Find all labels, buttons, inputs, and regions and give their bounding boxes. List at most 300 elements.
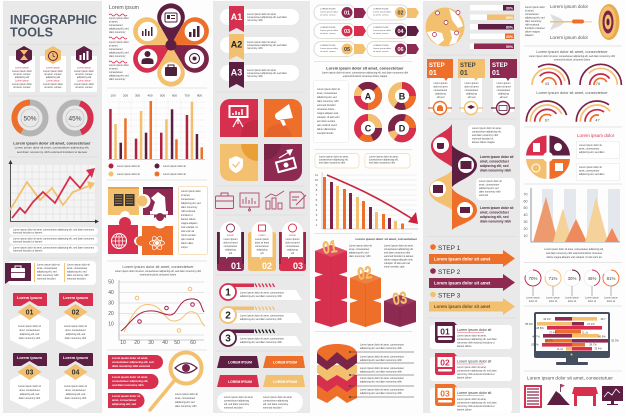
puzzle text box: adipiscing elit, sed <box>181 202 201 205</box>
card 01: 01 <box>231 261 241 271</box>
timeline red segment <box>431 124 452 167</box>
arc gauges: Lorem ipsum dolor sit amet, consectetuer <box>536 49 608 54</box>
percent rings: dolor sit <box>529 300 538 303</box>
briefcase callout: adipiscing elit, sed <box>37 270 57 274</box>
numbered pill list: LOREM IPSUM <box>320 45 335 47</box>
briefcase callout: euismod tincidunt <box>37 278 56 280</box>
card 02: dolor sit amet <box>255 242 270 244</box>
strip 1 <box>220 284 302 300</box>
arc gauges: euismod tincidunt ut laoreet dolore <box>554 58 591 62</box>
ribbons A1 A2 A3: Lorem ipsum dolor sit amet, <box>247 13 277 16</box>
list cards with badges: nonummy nibh euismod tincidunt ut <box>457 342 495 344</box>
petal diagram text column: diam nonummy <box>109 31 126 34</box>
curve chart: 20 <box>134 340 140 346</box>
petal diagram text column <box>109 5 139 81</box>
cube text: adipiscing elit, sed <box>349 252 369 254</box>
step 1 <box>429 244 515 267</box>
puzzle text box: minim veniam, <box>181 234 197 237</box>
numbered pill list: LOREM IPSUM <box>373 45 388 47</box>
icon: rising bars <box>76 46 92 64</box>
briefcase callout: diam nonummy nibh <box>37 274 59 277</box>
list cards with badges: Lorem ipsum dolor sit <box>457 360 491 364</box>
bar chart legend: Lorem ipsum dolor sit <box>117 173 140 176</box>
card text: Lorem ipsum <box>46 80 60 82</box>
list cards with badges: laoreet dolore <box>457 376 472 380</box>
dart and target: dolore magna <box>525 30 540 34</box>
card text: adipiscing elit <box>77 76 92 79</box>
timeline text boxes: adipiscing elit, sed <box>480 164 509 168</box>
cube text: euismod tincidunt ut laoreet <box>384 255 414 258</box>
dotted text box: diam nonummy nibh <box>317 100 339 103</box>
grouped bar chart: 400 <box>147 94 153 98</box>
red callout tags: Lorem ipsum dolor sit amet, <box>112 375 148 379</box>
curve chart: 50 <box>174 340 180 346</box>
percent rings: dolor sit <box>607 300 616 303</box>
grouped bar chart: 700 <box>184 94 190 98</box>
strip 1: Lorem ipsum dolor sit amet, consectetuer <box>240 292 284 294</box>
percent rings: dolor sit <box>588 300 597 303</box>
tag captions: diam nonummy nibh <box>19 337 41 340</box>
curve chart: 30 <box>108 300 114 306</box>
dotted text box: magna aliquam erat <box>317 112 338 115</box>
step 3: STEP 3 <box>438 292 461 300</box>
step card dark: Lorem ipsum <box>497 82 510 85</box>
dotted text box: suscipit lobortis <box>317 132 334 135</box>
3D numbers <box>321 237 408 309</box>
puzzle text box: laoreet dolore <box>181 218 196 221</box>
numbered pill list: Lorem ipsum dolor <box>320 47 338 50</box>
cube text: amet, consectetuer <box>349 248 370 251</box>
bar chart legend: Lorem ipsum dolor sit <box>163 165 186 168</box>
strip 3: 3 <box>225 334 231 344</box>
petal icons <box>142 13 200 76</box>
curve chart: 60 <box>190 340 196 346</box>
donut section heading: Lorem ipsum dolor sit amet, consectetuer <box>326 66 404 70</box>
percent rings: Lorem ipsum <box>526 296 540 300</box>
icon: monitor chart <box>602 386 623 405</box>
bottom text pill <box>217 392 303 412</box>
card 03: Lorem ipsum <box>286 238 299 241</box>
dotted text box: adipiscing elit, sed <box>317 96 337 99</box>
tag captions: adipiscing elit, sed <box>66 393 86 396</box>
ring A: A <box>365 92 372 102</box>
ring C: C <box>365 124 372 134</box>
percent rings: Lorem ipsum <box>546 296 560 300</box>
title <box>10 12 98 40</box>
curve chart: 10 <box>120 340 126 346</box>
dart and target: nibh euismod <box>525 24 540 26</box>
step card yellow <box>458 59 485 114</box>
donut caption <box>13 140 91 154</box>
briefcase callout: Lorem ipsum dolor sit <box>37 264 60 266</box>
petal diagram text column: Lorem ipsum dolor <box>109 17 129 20</box>
text pills: Lorem ipsum dolor sit amet, consectetuer adipiscing elit, sed diam nonummy <box>13 228 95 232</box>
step card orange: elit sed <box>437 96 445 99</box>
numbered pill list: LOREM IPSUM <box>373 8 388 10</box>
card text: Lorem ipsum dolor <box>74 83 94 86</box>
outline: document <box>290 192 306 208</box>
progress bars: 90% <box>506 45 514 49</box>
percent rings: 70% <box>529 276 537 281</box>
timeline text boxes: Lorem ipsum dolor sit <box>480 206 514 210</box>
timeline text boxes: diam nonummy nibh <box>480 168 511 172</box>
dart and target: sit amet, <box>525 10 534 12</box>
monitor butterfly chart: 11.2x <box>557 347 564 351</box>
monitor butterfly chart: 55.3% <box>611 338 619 342</box>
timeline text boxes: Lorem ipsum dolor sit <box>480 155 514 159</box>
step card dark: elit sed <box>500 96 508 99</box>
briefcase callout <box>5 261 96 285</box>
red callout tags: consectetuer adipiscing elit, <box>112 379 148 383</box>
step 2 <box>429 268 515 291</box>
badge 01: 01 <box>440 326 450 336</box>
timeline text boxes: Lorem ipsum dolor sit <box>479 180 502 183</box>
puzzle text box: erat volutpat. Ut <box>181 226 198 229</box>
bottom text pill: Lorem ipsum dolor sit amet <box>263 396 292 399</box>
step card yellow: elit sed <box>468 96 476 99</box>
timeline text boxes: euismod <box>479 194 489 197</box>
timeline text boxes: adipiscing elit, sed <box>480 215 509 219</box>
monitor butterfly chart: 28.7% <box>589 342 597 346</box>
petal diagram <box>128 3 214 87</box>
arc gauges: Lorem ipsum dolor sit amet, consectetuer <box>536 90 608 95</box>
red callout tags: Lorem ipsum dolor sit <box>112 394 140 398</box>
timeline text boxes: amet, consectetuer <box>480 210 510 214</box>
numbered strips <box>220 284 302 346</box>
ring D: D <box>399 124 406 134</box>
card 02: elit <box>260 252 264 255</box>
gauge 67: 67 <box>545 118 550 122</box>
layered chevron stack: Lorem ipsum dolor sit amet, consectetuer <box>360 367 404 370</box>
dart and target: diam nonummy <box>525 20 542 23</box>
text pills: Lorem ipsum dolor sit amet, consectetuer adipiscing elit, sed diam nonummy <box>13 246 95 250</box>
layered chevron stack: Lorem ipsum dolor sit amet, consectetuer <box>360 356 404 358</box>
briefcase callout: Lorem ipsum dolor sit <box>67 264 90 266</box>
numbered hexagon tags <box>10 293 95 409</box>
petal diagram text column: Lorem ipsum dolor <box>109 41 129 44</box>
card text: adipiscing elit <box>15 76 30 79</box>
petal diagram text column: consectetuer <box>109 71 123 74</box>
layered chevron stack: adipiscing elit, sed diam nonummy nibh <box>360 347 402 350</box>
card text: Lorem ipsum dolor <box>12 70 32 73</box>
title: TOOLS <box>10 24 53 40</box>
tag 04 <box>59 353 93 380</box>
monitor butterfly chart: 11.2x <box>582 330 589 334</box>
percent rings: 30% <box>568 276 576 281</box>
step card dark: adipiscing <box>498 92 509 96</box>
list cards with badges: laoreet dolore <box>457 408 472 412</box>
card 01: Lorem <box>227 234 234 237</box>
petal diagram text column: diam nonummy <box>109 55 126 58</box>
dotted text box: tation ullamcorper <box>317 128 336 131</box>
pie caption boxes: Lorem ipsum dolor sit <box>579 144 602 147</box>
grouped bar chart: 800 <box>197 94 202 98</box>
step card dark: STEP <box>492 63 508 69</box>
arc gauges: Lorem ipsum dolor sit amet, consectetuer adipiscing elit, sed diam nonummy nibh <box>529 55 616 58</box>
petal diagram text column: sit amet, <box>109 68 118 70</box>
numbered pill list: 02 <box>397 10 404 16</box>
step card yellow: STEP <box>460 63 476 69</box>
card 01: consectetuer <box>224 245 238 248</box>
percent rings: 46% <box>588 276 596 281</box>
ribbon A1: A1 <box>231 12 242 22</box>
descending bar chart <box>315 172 418 229</box>
step 2: Lorem ipsum dolor sit amet <box>434 280 491 286</box>
monitor butterfly chart: 40.7% <box>532 334 540 338</box>
list cards with badges: nonummy nibh euismod tincidunt ut <box>457 405 495 408</box>
line chart heading <box>115 264 202 276</box>
card 01: elit <box>229 252 232 255</box>
bottom text pill: euismod tincidunt <box>224 406 243 410</box>
card 01 <box>217 222 244 271</box>
triangle area chart: 30 <box>524 220 528 224</box>
step 1: STEP 1 <box>438 245 461 252</box>
gauge 47: 47 <box>595 118 600 122</box>
layered chevron stack: adipiscing elit, sed diam nonummy nibh <box>360 359 402 362</box>
ribbon labels <box>217 356 305 387</box>
monitor butterfly chart: 27.4% <box>587 322 595 326</box>
cube text: sed diam nonummy nibh <box>384 252 411 254</box>
timeline text boxes: consectetuer adipiscing elit, <box>472 130 502 134</box>
tag captions: Lorem ipsum dolor sit <box>18 325 41 328</box>
petal diagram text column: Lorem ipsum dolor <box>109 64 129 67</box>
tag captions: amet, consectetuer <box>19 389 40 392</box>
timeline text boxes: sed diam nonummy nibh <box>472 134 499 137</box>
bottom text pill: euismod tincidunt <box>263 406 282 410</box>
ribbon labels: LOREM IPSUM <box>273 380 297 384</box>
dart and target: aliquam <box>525 34 533 37</box>
ribbons A1 A2 A3: consectetuer adipiscing elit, sed diam <box>247 44 287 47</box>
puzzle text box: quis nostrud <box>181 238 195 241</box>
card text: sit amet, consec <box>75 86 93 89</box>
layered chevron stack: adipiscing elit, sed diam nonummy nibh <box>360 370 402 374</box>
descending bar chart: 4 <box>316 208 318 212</box>
step 3: Lorem ipsum dolor sit amet <box>434 304 491 309</box>
card 03: elit <box>291 252 294 255</box>
card text: sit amet, consec <box>44 86 62 89</box>
card text: Lorem ipsum dolor <box>12 83 32 86</box>
area chart caption: Lorem ipsum dolor sit amet, consectetuer adipiscing elit, <box>544 248 604 251</box>
strip 2: adipiscing elit, sed diam nonummy nibh <box>240 318 282 321</box>
world globe <box>426 8 464 46</box>
list cards with badges: nonummy nibh euismod tincidunt ut <box>457 373 495 376</box>
dart and target: adipiscing elit, sed <box>525 16 545 20</box>
strip 3: Lorem ipsum dolor sit amet, consectetuer <box>240 338 284 340</box>
ribbons A1 A2 A3: consectetuer adipiscing elit, sed diam <box>247 16 287 19</box>
text pills: euismod tincidunt ut laoreet <box>13 232 43 234</box>
timeline text boxes <box>468 125 515 224</box>
cube text: Lorem ipsum dolor sit amet, <box>384 244 414 248</box>
progress bars: 80% <box>506 25 514 29</box>
red callout tags: Lorem ipsum dolor sit amet, <box>112 356 148 360</box>
timeline text boxes: amet, consectetuer <box>479 184 500 186</box>
descending bar chart: 7 <box>316 193 318 197</box>
briefcase callout: amet, consectetuer <box>37 267 58 270</box>
tag 02: Lorem ipsum <box>63 295 88 300</box>
bottom text pill: consectetuer adipiscing <box>263 400 289 402</box>
red callout tags: adipiscing elit, sed <box>112 402 136 406</box>
card text <box>12 66 94 89</box>
numbered pill list: sit amet, consec <box>320 32 337 35</box>
ribbon A2: A2 <box>231 40 242 50</box>
icon: hourglass <box>16 46 32 64</box>
puzzle text box: consectetuer <box>181 198 195 201</box>
grouped bar chart <box>108 94 205 176</box>
layered chevron stack: Lorem ipsum dolor sit amet, consectetuer <box>360 388 404 392</box>
step 1: Lorem ipsum dolor sit amet <box>434 256 491 262</box>
tile: money <box>264 144 302 181</box>
triangle area chart: 20 <box>524 227 528 231</box>
two text boxes: consectetuer adipiscing elit, <box>319 158 349 162</box>
card 03: consectetuer <box>286 245 300 248</box>
pie caption boxes: amet, consectetuer <box>579 170 600 172</box>
donut caption: Lorem ipsum dolor sit amet, consectetuer adipiscing elit, <box>15 146 90 150</box>
pie caption boxes: Lorem ipsum dolor sit <box>579 166 602 169</box>
timeline orange segment <box>452 188 477 230</box>
numbered pill list: Lorem ipsum dolor <box>373 29 391 32</box>
petal diagram text column: Lorem ipsum <box>109 5 139 11</box>
petal diagram text column: diam nonummy <box>109 78 126 81</box>
monitor butterfly chart: 33.4% <box>543 317 551 321</box>
tag 04: 04 <box>72 370 79 376</box>
card 02: 02 <box>262 261 272 271</box>
magnifier text: Lorem ipsum dolor sit <box>175 393 198 396</box>
red callout tags: sed diam nonummy nibh <box>112 383 144 387</box>
tag 02: 02 <box>72 310 79 316</box>
numbered pill list: 01 <box>344 10 350 16</box>
numbered pill list: Lorem ipsum dolor <box>320 29 338 32</box>
dotted text box: volutpat. Ut wisi enim <box>317 116 340 119</box>
card 03: dolor sit amet <box>285 242 300 244</box>
petal diagram text column: sit amet, <box>109 20 118 24</box>
card 03: Lorem <box>289 234 296 237</box>
percent rings: dolor sit <box>549 300 558 303</box>
quadrant pie <box>526 136 570 179</box>
puzzle: globe <box>108 217 138 254</box>
progress bars: 30% <box>506 6 514 10</box>
briefcase callout: adipiscing elit, sed <box>67 270 87 274</box>
puzzle text box: Lorem ipsum dolor <box>181 190 201 193</box>
briefcase callout: amet, consectetuer <box>67 267 88 270</box>
numbered pill list: 05 <box>344 47 350 53</box>
cube text: minim veniam, quis <box>384 266 405 268</box>
card text: Lorem ipsum dolor <box>74 70 94 73</box>
card text: Lorem ipsum <box>15 66 29 70</box>
dart and target: Lorem ipsum dolor <box>525 6 545 9</box>
monitor butterfly chart: 48.7 <box>600 317 606 321</box>
curve chart: 40 <box>108 290 114 296</box>
dark stack <box>384 295 416 327</box>
donut section heading <box>322 66 409 78</box>
curve chart: 40 <box>162 340 168 346</box>
magnifier with eye <box>150 352 202 410</box>
monitor butterfly chart: 28.8% <box>536 326 544 330</box>
strip 3 <box>220 330 302 346</box>
ribbon labels: LOREM IPSUM <box>273 360 297 364</box>
step card orange: STEP <box>429 63 445 69</box>
icon tiles <box>220 99 302 181</box>
red callout tags: amet, consectetuer <box>112 398 136 402</box>
pie caption boxes: adipiscing elit, sed diam <box>579 173 604 176</box>
ribbon labels: LOREM IPSUM <box>228 360 252 364</box>
line chart with arrows <box>8 160 99 224</box>
icon: mountain flag <box>547 384 570 405</box>
card text: Lorem ipsum <box>77 66 91 70</box>
triangle area chart: 50 <box>524 206 528 210</box>
strip 2: Lorem ipsum dolor sit amet, consectetuer <box>240 314 284 318</box>
layered chevron stack: adipiscing elit, sed diam nonummy nibh <box>360 392 402 395</box>
cube text <box>349 237 418 268</box>
timeline text boxes: amet, consectetuer <box>480 160 510 164</box>
step arrows <box>429 244 515 315</box>
dart and target: Lorem ipsum dolor <box>550 35 589 40</box>
puzzle: atom <box>134 213 173 255</box>
zigzag timeline <box>429 124 515 230</box>
step card dark: dolor sit amet <box>496 86 511 88</box>
progress bars: 20% <box>506 35 514 39</box>
cube text: consectetuer adipiscing elit, <box>384 248 414 251</box>
two text boxes: Lorem ipsum dolor sit amet, <box>319 156 349 158</box>
descending bar chart: 9 <box>316 183 318 187</box>
bar chart legend: Lorem ipsum dolor sit <box>117 165 140 168</box>
ribbons A1 A2 A3: nonummy nibh <box>247 47 263 50</box>
monitor butterfly chart: 53.8% <box>531 342 539 346</box>
timeline text boxes: euismod tincidunt ut <box>472 138 494 140</box>
bottom text pill: consectetuer adipiscing <box>224 400 250 402</box>
dart and target: Lorem ipsum dolor <box>550 4 589 9</box>
descending bar chart: 3 <box>316 213 318 217</box>
numbered pill list: sit amet, consec <box>373 14 390 16</box>
puzzle: book <box>108 187 148 221</box>
bottom icons heading: Lorem ipsum dolor sit amet, consectetuer <box>527 376 613 380</box>
step card orange: adipiscing <box>435 92 446 96</box>
numbered pill list: 04 <box>397 29 404 35</box>
card text: Lorem ipsum dolor <box>43 83 63 86</box>
puzzle pieces <box>108 187 173 255</box>
cube text: dolore magna aliquam erat <box>384 258 413 262</box>
curve chart: 20 <box>108 311 114 317</box>
area chart caption: sed diam nonummy nibh euismod tincidunt ut laoreet <box>546 252 602 255</box>
magnifier text <box>175 393 198 408</box>
strip 2: 2 <box>225 310 231 322</box>
grouped bar chart: 300 <box>135 94 140 98</box>
strip 1: adipiscing elit, sed diam nonummy nibh <box>240 295 282 298</box>
timeline text boxes: diam nonummy nibh <box>480 220 511 224</box>
curve chart: 50 <box>108 280 114 286</box>
tag captions: amet, consectetuer <box>65 389 86 392</box>
dotted text box: euismod tincidunt <box>317 104 336 107</box>
step card dark <box>490 59 517 114</box>
donut charts <box>14 102 91 134</box>
tag 04: Lorem ipsum <box>63 355 88 360</box>
numbered pill list: sit amet, consec <box>320 50 337 53</box>
numbered pill list: Lorem ipsum dolor <box>373 47 391 50</box>
bar chart legend: Lorem ipsum dolor sit <box>163 173 186 176</box>
tag 01 <box>13 293 47 320</box>
ABCD ring charts <box>357 85 413 139</box>
ribbons A1 A2 A3: Lorem ipsum dolor sit amet, <box>247 69 277 72</box>
tag captions: amet, consectetuer <box>19 329 40 332</box>
triangle area chart: 60 <box>524 200 528 204</box>
two text boxes: consectetuer adipiscing elit, <box>369 158 399 162</box>
card text: sit amet, consec <box>75 73 93 76</box>
magnifier text: amet, consectetuer <box>175 397 196 400</box>
tag 03: Lorem ipsum <box>17 355 42 360</box>
card text: Lorem ipsum dolor <box>43 70 63 73</box>
step card orange: dolor sit amet <box>433 86 448 88</box>
card 02: Lorem <box>259 234 265 237</box>
triangle area chart: 70 <box>524 192 528 196</box>
